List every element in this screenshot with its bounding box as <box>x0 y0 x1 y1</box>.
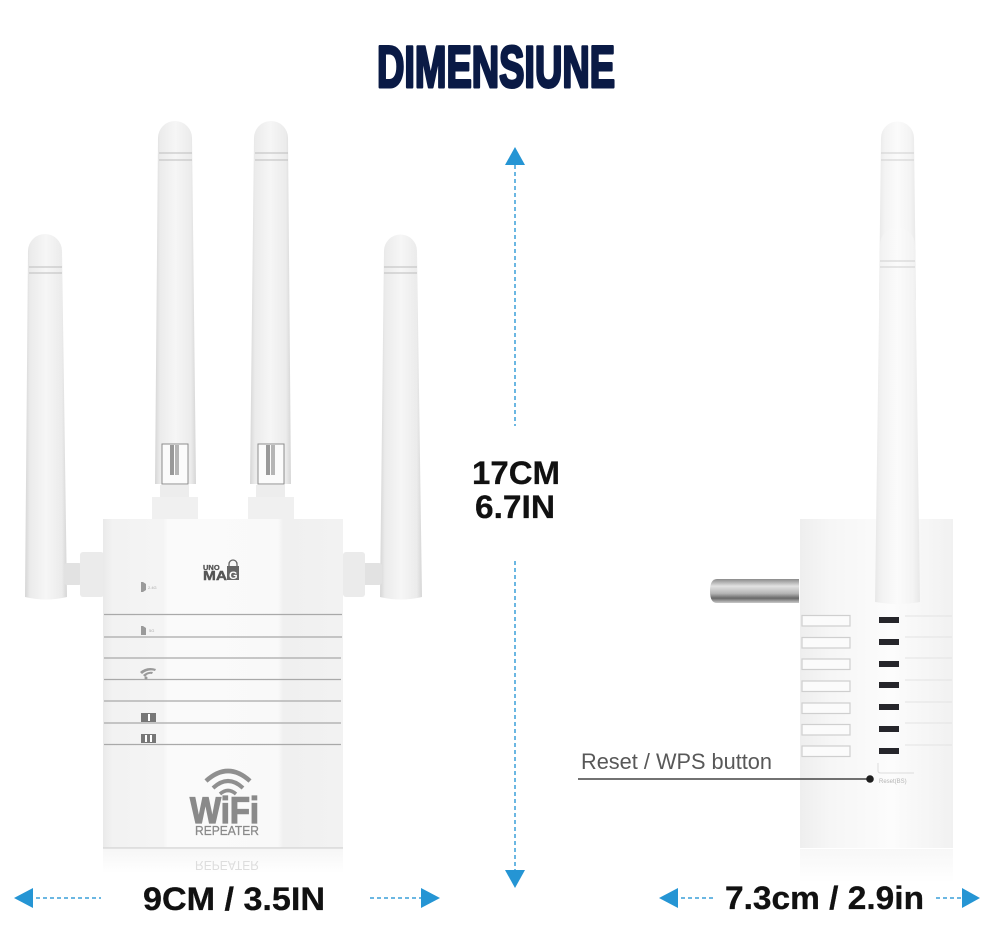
arrow left <box>14 888 33 908</box>
arrow left <box>659 888 678 908</box>
brand logo: G <box>229 570 238 582</box>
status icons <box>140 582 157 743</box>
front antenna <box>875 228 920 604</box>
brand logo <box>203 560 239 583</box>
arrow up <box>505 147 525 165</box>
title: DIMENSIUNE <box>377 35 615 100</box>
depth dimension: side <box>659 880 980 916</box>
reflection <box>103 849 343 873</box>
repeater label: REPEATER <box>195 824 259 838</box>
vent slots <box>802 616 850 756</box>
device body <box>103 519 343 848</box>
side ribs <box>905 616 952 745</box>
antenna: inner left <box>152 121 198 519</box>
height label: 17CM <box>472 455 560 491</box>
arrow right <box>421 888 440 908</box>
height dimension <box>472 147 560 888</box>
width dimension: front <box>14 881 440 917</box>
rear antenna <box>879 122 916 300</box>
reflection: REPEATER <box>195 858 259 872</box>
front view: wifi repeater <box>25 121 422 873</box>
wifi wordmark: WiFi <box>190 790 259 831</box>
antenna: far left <box>25 234 67 600</box>
width label: 9CM / 3.5IN <box>143 881 325 917</box>
brand logo: UNO <box>203 563 220 572</box>
right hinge <box>343 552 382 597</box>
reset callout: Reset / WPS button <box>581 749 772 774</box>
reset label: Reset(BS) <box>879 779 907 785</box>
arrow down <box>505 870 525 888</box>
status icons: 5G <box>149 628 154 633</box>
side view: device profile <box>578 122 953 883</box>
antenna: far right <box>380 235 422 600</box>
depth label: 7.3cm / 2.9in <box>725 880 924 916</box>
leader line <box>578 775 874 783</box>
reset button outline <box>878 763 914 773</box>
antenna: inner right <box>248 121 294 519</box>
wifi symbol <box>206 771 250 794</box>
height label imperial: 6.7IN <box>475 489 555 525</box>
side reflection <box>800 849 953 883</box>
plug pin <box>710 579 799 603</box>
status icons: 2.4G <box>148 585 157 590</box>
brand logo: MA <box>203 568 228 583</box>
arrow right <box>962 888 980 908</box>
vent ribs <box>104 614 342 744</box>
black slots <box>879 617 899 754</box>
side body <box>800 519 953 848</box>
left hinge <box>64 552 104 597</box>
